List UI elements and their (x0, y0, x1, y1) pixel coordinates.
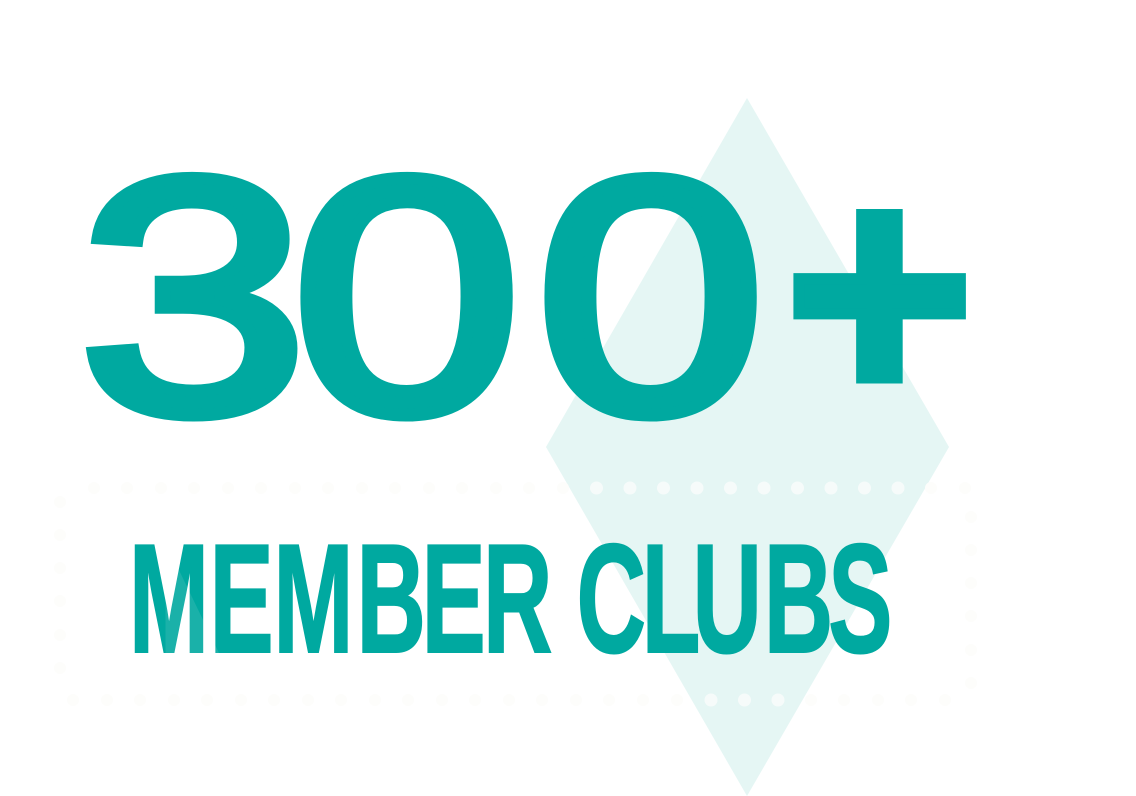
figure: 300+: + (785, 113, 973, 472)
overlay diamond tint on text (166, 566, 219, 653)
dotted border pattern (54, 482, 977, 706)
background diamond (546, 98, 949, 796)
label: MEMBER CLUBS: MEMBER CLUBS (129, 513, 892, 686)
figure: 300+: 300 (79, 109, 765, 483)
